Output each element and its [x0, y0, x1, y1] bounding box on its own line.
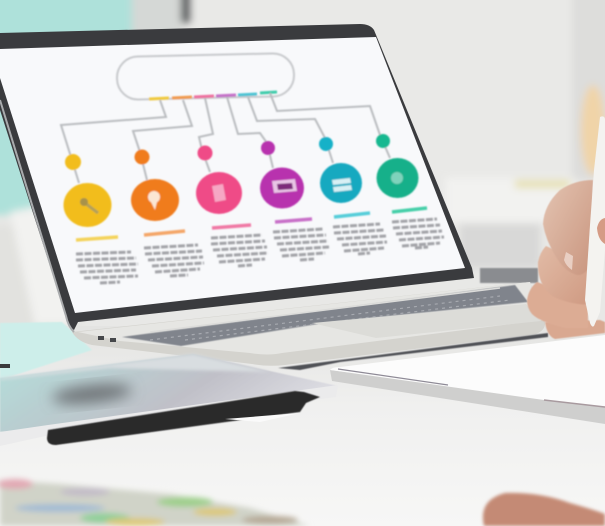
- keyboard: [122, 285, 528, 346]
- hand holding stylus: [527, 116, 605, 339]
- mint panel behind tablet: [0, 322, 92, 380]
- column 2: orange: [131, 150, 204, 276]
- stylus on tablet: [47, 391, 320, 445]
- desk surface: [0, 326, 605, 526]
- pill colour segments: [149, 92, 277, 99]
- laptop: [0, 24, 545, 366]
- white tablet on right: [278, 333, 605, 424]
- infographic on screen: [61, 53, 444, 283]
- header pill: [117, 53, 294, 100]
- column 3: pink: [196, 146, 268, 266]
- column 5: teal: [319, 137, 387, 254]
- index finger: [543, 180, 593, 275]
- blurred fingertip foreground: [483, 493, 605, 526]
- trackpad: [312, 304, 541, 338]
- drawing tablet with mint reflection: [0, 354, 338, 446]
- ring finger: [527, 282, 588, 328]
- laptop base: [72, 282, 545, 366]
- column 6: green: [376, 134, 444, 248]
- connector lines: [61, 93, 390, 183]
- stylus in hand: [585, 116, 605, 327]
- laptop shadow on desk: [278, 333, 548, 370]
- laptop bezel: [0, 24, 474, 330]
- blurred colour swatch book foreground: [0, 479, 310, 526]
- background wall: [0, 0, 605, 340]
- middle finger: [538, 246, 590, 305]
- lower hand: [545, 320, 605, 339]
- fingernail: [564, 252, 573, 270]
- thumb tip: [597, 218, 605, 244]
- column 1: yellow: [64, 154, 138, 283]
- laptop screen: [0, 37, 465, 313]
- column 4: purple: [260, 141, 329, 260]
